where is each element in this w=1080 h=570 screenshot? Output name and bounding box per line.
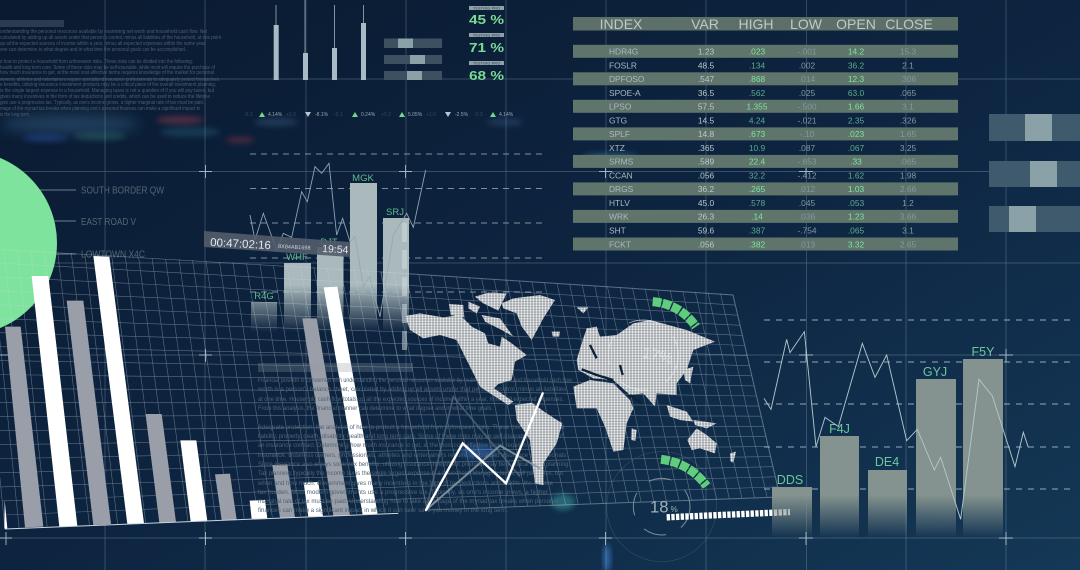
percentage readouts bbox=[469, 6, 504, 83]
table rows: 26.3 bbox=[698, 212, 714, 222]
dashed white marker column bbox=[402, 223, 407, 352]
top-left paragraph: calculated by adding up all assets under that person's control, minus all liabilities of the household, at one point bbox=[0, 35, 221, 41]
legend labels bbox=[81, 186, 164, 260]
timestamp band: 8X84AB1698 bbox=[278, 244, 311, 252]
top-left paragraph: one can determine to what degree and in what time the personal goals can be accomplished. bbox=[0, 47, 186, 53]
islands bbox=[449, 293, 736, 463]
table rows: .013 bbox=[799, 239, 815, 249]
table rows: 14.2 bbox=[848, 47, 864, 57]
lower gauge dial: % bbox=[671, 505, 678, 514]
lower perspective paragraph: Since insurance also enjoys some tax benefits, utilizing insurance investment products may be a critical piece planning. bbox=[258, 462, 570, 468]
ticker row: -2.5% bbox=[455, 112, 469, 118]
right bar labels: GYJ bbox=[923, 365, 947, 379]
table rows: SRMS bbox=[609, 157, 634, 167]
legend labels: SOUTH BORDER QW bbox=[81, 186, 164, 196]
top-left paragraph: d how to protect a household from unforeseen risks. These risks can be divided into the following: bbox=[0, 59, 193, 65]
table rows: 22.4 bbox=[749, 157, 765, 167]
table rows: HTLV bbox=[609, 198, 630, 208]
percentage readouts: TESTING PRO bbox=[473, 34, 500, 38]
table rows: FCKT bbox=[609, 239, 631, 249]
table header: LOW bbox=[790, 16, 823, 32]
table rows: -.10 bbox=[800, 129, 815, 139]
table rows: FOSLR bbox=[609, 60, 637, 70]
table rows: .562 bbox=[749, 88, 765, 98]
top-left paragraph: how much insurance to get, at the most cost effective terms requires knowledge of the market for personal bbox=[0, 70, 214, 76]
table rows: 1.66 bbox=[848, 102, 864, 112]
lower perspective paragraph: when and how much. Government gives many incentives in the form of tax deductions and credits, the lifetime bbox=[257, 481, 554, 487]
top-left paragraph: understanding the personal resources available by examining net worth and household cash flow. Net bbox=[0, 29, 207, 35]
middle bar labels: DJT bbox=[320, 237, 338, 248]
table rows: LPSO bbox=[609, 102, 632, 112]
table rows: .056 bbox=[698, 239, 714, 249]
ticker row: 5.05% bbox=[408, 112, 423, 118]
lower perspective paragraph: insurance. Business owners, professionals, athletes and entertainers require specialized insurance professionals. bbox=[258, 453, 568, 459]
table rows: 3.1 bbox=[902, 102, 914, 112]
table header: VAR bbox=[691, 16, 719, 32]
table rows: .056 bbox=[698, 170, 714, 180]
top progress meters bbox=[384, 38, 442, 80]
greenland bbox=[502, 295, 555, 340]
timestamp band bbox=[204, 231, 350, 257]
middle bar labels: WHF bbox=[286, 252, 308, 263]
table rows: 1.355 bbox=[747, 102, 768, 112]
upper gauge dial: 17% bbox=[641, 345, 675, 368]
data table bbox=[573, 16, 958, 250]
table rows: 1.23 bbox=[848, 212, 864, 222]
lower gauge dial bbox=[607, 452, 717, 562]
ticker row: -8.1% bbox=[315, 112, 329, 118]
mediterranean and inland seas bbox=[582, 345, 642, 403]
ticker row bbox=[244, 112, 514, 118]
legend labels: LOWTOWN X4C bbox=[81, 250, 145, 260]
lower perspective paragraph: an insurance contract. Determining how much insurance to get, at the most cost effective terms requires knowledge. bbox=[258, 443, 558, 449]
ticker row: +1.0 bbox=[426, 112, 436, 118]
table rows: .547 bbox=[698, 74, 714, 84]
table rows: 36.2 bbox=[848, 60, 864, 70]
table rows: 2.66 bbox=[900, 184, 916, 194]
percentage readouts: 68 % bbox=[469, 69, 504, 83]
table rows: .036 bbox=[799, 212, 815, 222]
table rows: 59.6 bbox=[698, 226, 714, 236]
green circle bbox=[0, 151, 57, 335]
table rows: .365 bbox=[698, 143, 714, 153]
table rows: 1.98 bbox=[900, 170, 916, 180]
lower perspective paragraph: From this analysis, the financial planner can determine to what degree and in what time goals. bbox=[258, 406, 493, 412]
lower perspective paragraph: at one time. Household cash flow totals up all the expected sources of income within a year, minus all expected expenses. bbox=[258, 397, 564, 403]
table rows: 4.24 bbox=[749, 115, 765, 125]
percentage readouts: 71 % bbox=[469, 41, 504, 55]
top-left paragraph: up all the expected sources of income within a year, minus all expected expenses within the same year. bbox=[0, 41, 206, 47]
lower perspective paragraph: finances can make a significant impact in which it can later save you money in the long term. bbox=[258, 508, 508, 514]
perspective map panel grid bbox=[381, 272, 780, 510]
table rows: .265 bbox=[749, 184, 765, 194]
lower perspective paragraph: worth is a person's balance sheet, calculated by adding up all assets under that person's control, minus all liabilities. bbox=[257, 387, 568, 393]
right line chart bbox=[764, 332, 1028, 519]
lower perspective paragraph: liability, property, death, disability, health and long term care. Some of these risks may be self-insurable, purchase of bbox=[258, 434, 563, 440]
top-left paragraph: gies use a progressive tax. Typically, as one's income grows, a higher marginal rate of tax must be paid. bbox=[0, 100, 204, 106]
perspective grid left bbox=[0, 248, 425, 529]
table rows: .067 bbox=[848, 143, 864, 153]
table rows: .045 bbox=[799, 198, 815, 208]
eurasia bbox=[577, 320, 715, 407]
white bars bbox=[4, 256, 378, 529]
table rows: 63.0 bbox=[848, 88, 864, 98]
table rows: 48.5 bbox=[698, 60, 714, 70]
lower perspective paragraph: Adequate protection: the analysis of how to protect a household from unforeseen risks. These risks can be divided. bbox=[258, 425, 566, 431]
legend leader lines bbox=[35, 190, 76, 254]
table header: HIGH bbox=[738, 16, 774, 32]
table rows: GTG bbox=[609, 115, 627, 125]
table rows: 32.2 bbox=[749, 170, 765, 180]
right bar labels bbox=[777, 345, 995, 487]
table rows: .578 bbox=[749, 198, 765, 208]
table rows: .087 bbox=[799, 143, 815, 153]
lower perspective paragraph bbox=[257, 363, 573, 514]
right bars bbox=[772, 359, 1003, 538]
table rows: .382 bbox=[749, 239, 765, 249]
top-left paragraph: ntage of the myriad tax breaks when planning one's personal finances can make a significant impact in bbox=[0, 106, 200, 112]
right chart dashed guides bbox=[764, 320, 1076, 489]
table rows: .025 bbox=[799, 88, 815, 98]
table rows: 1.03 bbox=[848, 184, 864, 194]
upper gauge arc bbox=[653, 302, 696, 327]
south america bbox=[515, 403, 562, 485]
table rows: 36.5 bbox=[698, 88, 714, 98]
table rows: -.412 bbox=[797, 170, 817, 180]
table rows: .14 bbox=[751, 212, 763, 222]
ticker row: 4.14% bbox=[499, 112, 514, 118]
middle bars bbox=[251, 183, 409, 333]
table rows: .065 bbox=[848, 226, 864, 236]
right bar and line chart bbox=[764, 320, 1076, 538]
table rows: 1.65 bbox=[900, 129, 916, 139]
gray line chart bbox=[426, 446, 540, 510]
table rows bbox=[609, 47, 916, 249]
table header bbox=[573, 16, 958, 32]
top-left paragraph: is the single largest expense in a household. Managing taxes is not a question of if you will pay taxes, but bbox=[0, 88, 214, 94]
ticker row: -0.1 bbox=[334, 112, 343, 118]
upper gauge dial bbox=[608, 320, 678, 390]
table rows: 1.2 bbox=[902, 198, 914, 208]
middle chart dashed guides bbox=[250, 154, 542, 292]
lower perspective paragraph: marginal rate of tax must be paid. Understanding how to take advantage of the myriad tax breaks when personal bbox=[258, 499, 558, 505]
table rows: SPOE-A bbox=[609, 88, 641, 98]
table rows: DPFOSO bbox=[609, 74, 645, 84]
table rows: .306 bbox=[900, 74, 916, 84]
table rows: -.754 bbox=[797, 226, 817, 236]
lower gauge dial: 18 bbox=[650, 498, 669, 517]
right bar labels: DDS bbox=[777, 473, 803, 487]
table rows: .589 bbox=[698, 157, 714, 167]
table rows: 14.5 bbox=[698, 115, 714, 125]
right bar labels: F4J bbox=[829, 422, 850, 436]
ticker row: -0.3 bbox=[474, 112, 483, 118]
middle line chart bbox=[250, 163, 426, 317]
gray bars bbox=[5, 301, 350, 527]
table rows: -.001 bbox=[797, 47, 817, 57]
top-left paragraph: e benefits, utilizing insurance investment products may be a critical piece of the overall investment planning. bbox=[0, 82, 216, 88]
lower perspective paragraph: Financial position is concerned with understanding the personal resources available by examining net worth and household cash flow. bbox=[258, 378, 573, 384]
table rows: XTZ bbox=[609, 143, 625, 153]
table rows: .673 bbox=[749, 129, 765, 139]
table rows: .134 bbox=[749, 60, 765, 70]
top-left paragraph: in the long term. bbox=[0, 112, 30, 118]
table rows: 14.8 bbox=[698, 129, 714, 139]
ticker row: 0.24% bbox=[361, 112, 376, 118]
table rows: 3.66 bbox=[900, 212, 916, 222]
world map bbox=[405, 293, 790, 562]
table rows: 3.1 bbox=[902, 226, 914, 236]
ticker row: -0.3 bbox=[244, 112, 253, 118]
table rows: -.653 bbox=[797, 157, 817, 167]
ticker row: +0.3 bbox=[286, 112, 296, 118]
table rows: .012 bbox=[799, 184, 815, 194]
table rows: SHT bbox=[609, 226, 626, 236]
table rows: .065 bbox=[900, 157, 916, 167]
table rows: 2.35 bbox=[848, 115, 864, 125]
table rows: .014 bbox=[799, 74, 815, 84]
table rows: 10.9 bbox=[749, 143, 765, 153]
table rows: 15.3 bbox=[900, 47, 916, 57]
middle bar labels: SRJ bbox=[386, 207, 404, 218]
grid cross markers bbox=[0, 165, 1013, 545]
table rows: .387 bbox=[749, 226, 765, 236]
lower perspective paragraph: tax burden. Most modern governments use a progressive tax. Typically, as one's income grows, a higher bbox=[258, 490, 548, 496]
lower perspective paragraph: Tax planning: typically the income tax is the single largest expense in a household. Managing taxes, will pay taxes, but bbox=[258, 471, 563, 477]
table rows: .868 bbox=[749, 74, 765, 84]
percentage readouts: TESTING PRO bbox=[473, 6, 500, 10]
table rows: 2.1 bbox=[902, 60, 914, 70]
top-left paragraph: owners, athletes and entertainers require specialized insurance professionals to adequately protect themselves. bbox=[0, 77, 220, 83]
table header: CLOSE bbox=[885, 16, 933, 32]
middle bar and line chart bbox=[204, 154, 542, 352]
table rows: 3.32 bbox=[848, 239, 864, 249]
africa bbox=[573, 380, 633, 452]
middle bar labels: R4G bbox=[254, 291, 274, 302]
table rows: SPLF bbox=[609, 129, 630, 139]
right bar labels: DE4 bbox=[875, 455, 899, 469]
timestamp band: 00:47:02:16 bbox=[210, 237, 271, 252]
table rows: .053 bbox=[848, 198, 864, 208]
right progress meters bbox=[989, 114, 1080, 232]
table rows: .326 bbox=[900, 115, 916, 125]
top-left paragraph: gives many incentives in the form of tax deductions and credits, which can be used to reduce the lifetime bbox=[0, 94, 210, 100]
table rows: .023 bbox=[848, 129, 864, 139]
percentage readouts: 45 % bbox=[469, 13, 504, 27]
timestamp band: 19:54 bbox=[322, 243, 349, 256]
table rows: 36.2 bbox=[698, 184, 714, 194]
australia bbox=[687, 428, 717, 453]
faint line chart bbox=[426, 397, 520, 510]
table rows: 12.3 bbox=[848, 74, 864, 84]
candlestick chart bbox=[274, 0, 366, 80]
table rows: .33 bbox=[850, 157, 862, 167]
table rows: 45.0 bbox=[698, 198, 714, 208]
table rows: DRGS bbox=[609, 184, 634, 194]
table rows: .065 bbox=[900, 88, 916, 98]
table rows: 1.23 bbox=[698, 47, 714, 57]
middle bar labels: MGK bbox=[352, 173, 374, 184]
ticker row: 4.14% bbox=[268, 112, 283, 118]
table rows: -.500 bbox=[797, 102, 817, 112]
right bar labels: F5Y bbox=[972, 345, 995, 359]
table header: INDEX bbox=[600, 16, 643, 32]
table rows: 3.25 bbox=[900, 143, 916, 153]
table rows: 1.62 bbox=[848, 170, 864, 180]
top-left paragraph bbox=[0, 20, 221, 118]
table rows: -.021 bbox=[797, 115, 817, 125]
table rows: CCAN bbox=[609, 170, 633, 180]
middle bar labels bbox=[254, 173, 404, 302]
table rows: 2.65 bbox=[900, 239, 916, 249]
legend labels: EAST ROAD V bbox=[81, 217, 136, 228]
table rows: .023 bbox=[749, 47, 765, 57]
table rows: 57.5 bbox=[698, 102, 714, 112]
left bar chart bbox=[4, 256, 398, 529]
north america bbox=[405, 313, 527, 405]
lower gauge arc bbox=[661, 459, 707, 486]
percentage readouts: TESTING PRO bbox=[473, 62, 500, 66]
ticker row: +0.2 bbox=[381, 112, 391, 118]
table rows: WRK bbox=[609, 212, 629, 222]
table rows: .002 bbox=[799, 60, 815, 70]
white line chart bbox=[426, 393, 543, 510]
table rows: HDR4G bbox=[609, 47, 638, 57]
table header: OPEN bbox=[836, 16, 876, 32]
chart baseline bbox=[5, 513, 398, 529]
circle legend bbox=[0, 151, 164, 335]
lens flare glows bbox=[0, 115, 638, 570]
top-left paragraph: health and long term care. Some of these risks may be self-insurable, while most will require the purchase of bbox=[0, 65, 215, 71]
hatched progress bar bbox=[667, 512, 790, 517]
table row stripes bbox=[573, 45, 958, 250]
